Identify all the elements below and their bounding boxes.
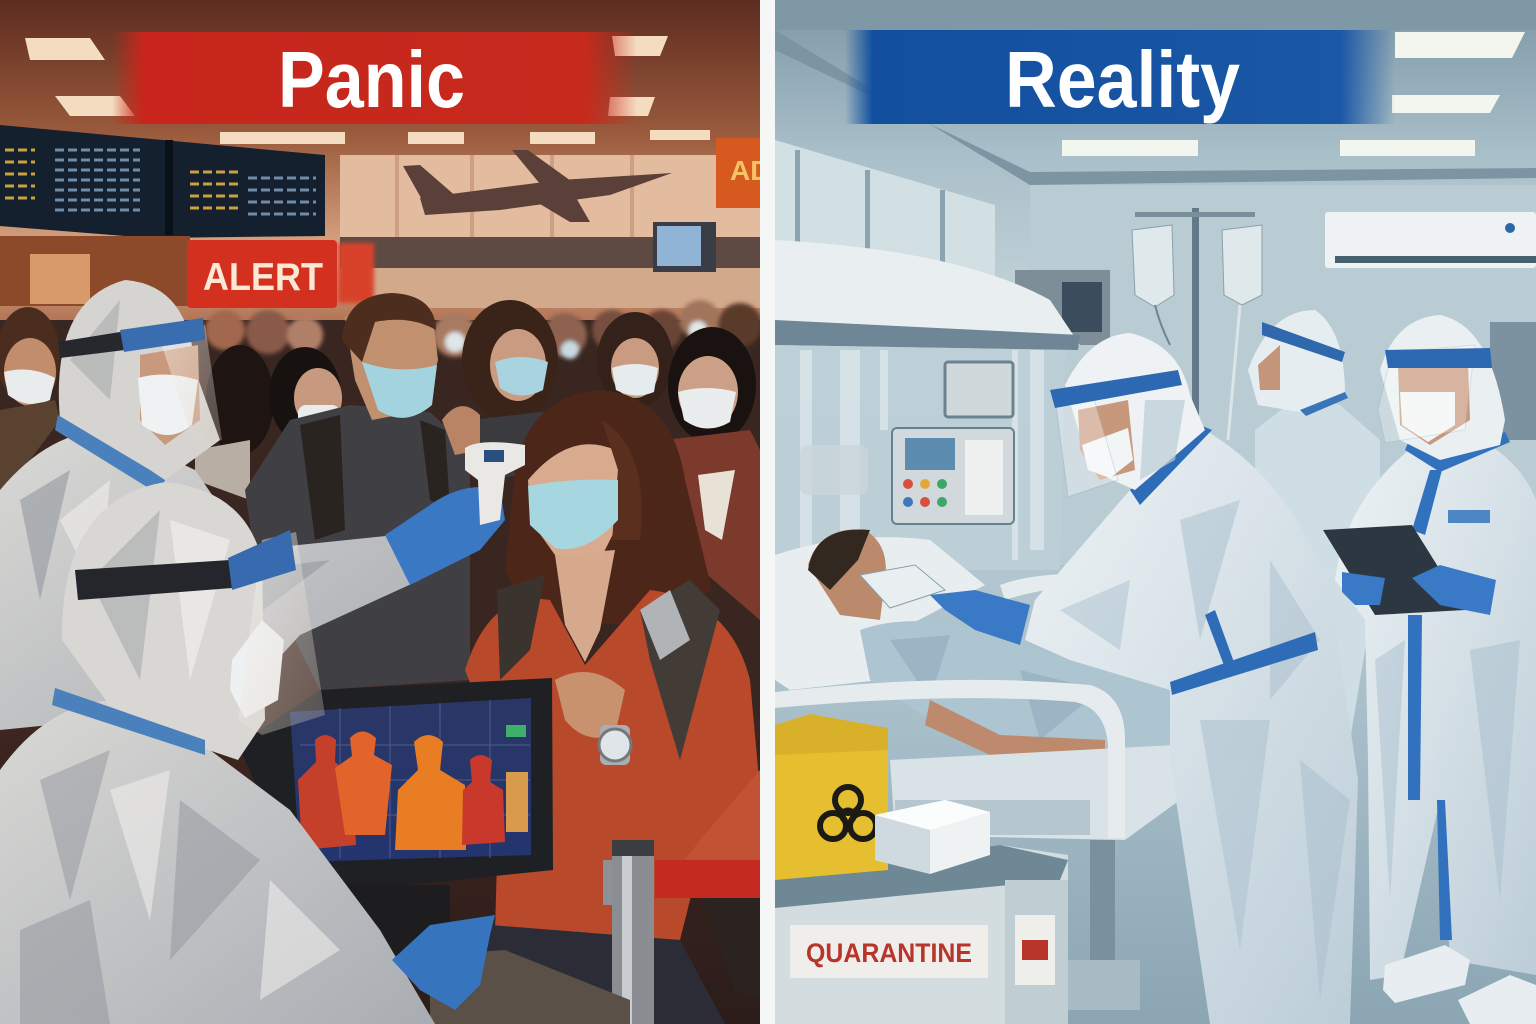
panic title banner: Panic <box>278 35 465 124</box>
cart with quarantine label <box>775 845 1068 1024</box>
face and mask <box>1078 400 1135 480</box>
orange AD sign <box>716 138 770 208</box>
face <box>140 345 200 445</box>
waist band <box>1170 632 1318 695</box>
shield <box>1378 345 1475 443</box>
handheld thermometer <box>465 442 525 525</box>
face <box>1398 362 1470 445</box>
pointing glove <box>392 915 495 1010</box>
panic title banner <box>112 32 637 124</box>
IV stand with drip bags <box>1132 208 1262 458</box>
quarantine label: QUARANTINE <box>806 938 972 968</box>
alert sign <box>187 240 374 308</box>
neck and face <box>555 550 615 662</box>
medical worker right <box>1323 315 1536 1024</box>
hazmat worker foreground <box>0 482 495 1024</box>
mask <box>230 620 284 718</box>
man with backpack <box>245 293 480 690</box>
small wall television <box>653 222 716 272</box>
panel: reality isolation ward <box>775 0 1536 1024</box>
thermal silhouettes <box>298 732 505 850</box>
left brown wall <box>0 236 190 306</box>
backpack straps <box>497 575 545 680</box>
collar <box>1405 432 1510 472</box>
quarantine label <box>790 925 988 978</box>
hood <box>1380 315 1505 460</box>
traveller woman right <box>597 312 673 408</box>
panel: panic airport scene <box>0 0 770 1024</box>
crowd of masked travellers <box>0 300 762 720</box>
face shield <box>238 532 325 735</box>
headband <box>1385 348 1492 368</box>
isolation tent <box>775 240 1080 570</box>
collar <box>1130 425 1212 505</box>
windows on left wall <box>775 140 995 285</box>
hand <box>555 672 625 738</box>
icon: airplane silhouette <box>403 150 672 222</box>
patient <box>808 529 1170 760</box>
reality title banner <box>845 30 1395 124</box>
divider <box>760 0 775 1024</box>
face shield <box>160 325 222 445</box>
headband <box>58 318 205 358</box>
ceiling lights <box>25 36 710 144</box>
small side label <box>1015 915 1055 985</box>
orange AD sign: AD <box>730 155 770 186</box>
glove <box>385 487 505 585</box>
window wall <box>340 155 760 240</box>
shield <box>1055 385 1118 497</box>
overhead beam <box>340 237 760 268</box>
traveller far left <box>0 307 60 500</box>
blue collar <box>52 688 205 755</box>
screen legend <box>506 725 528 832</box>
ceiling lights <box>1062 32 1525 156</box>
inspection desk <box>430 950 630 1024</box>
wall panel right <box>1490 322 1536 440</box>
medical worker foreground <box>930 333 1358 1024</box>
flight departure boards <box>0 125 325 238</box>
vital signs monitors <box>800 362 1014 524</box>
yellow biohazard bin <box>775 714 888 880</box>
boots <box>1383 945 1470 1003</box>
backpack lower right <box>700 860 760 1000</box>
ward back wall <box>1030 185 1536 565</box>
wall medical unit <box>1015 270 1110 345</box>
white supply box <box>875 800 990 874</box>
clipboard <box>1323 525 1465 615</box>
stanchion with red tape <box>603 840 760 1024</box>
glove <box>930 590 1030 645</box>
hood <box>59 280 220 480</box>
patient arm <box>925 700 1105 760</box>
headband <box>75 560 232 600</box>
woman traveller with red sweater <box>465 390 760 1024</box>
biohazard symbol <box>820 787 876 839</box>
headband <box>1050 370 1182 408</box>
chest label <box>1448 510 1490 523</box>
ceiling structure <box>775 0 1536 30</box>
mask <box>138 374 198 435</box>
long brown hair <box>505 390 712 625</box>
alert sign: ALERT <box>203 256 323 299</box>
background worker <box>1248 310 1380 800</box>
oxygen mask <box>860 565 945 608</box>
woman with dark hair behind <box>195 345 274 500</box>
patient head <box>808 529 886 620</box>
hood <box>62 482 265 760</box>
reality title banner: Reality <box>1005 35 1240 124</box>
face mask <box>528 480 618 549</box>
traveller woman centre <box>462 300 570 480</box>
bed and rails <box>775 574 1180 1010</box>
suit body <box>1025 430 1358 1024</box>
sweater <box>465 590 760 940</box>
hood <box>1065 333 1205 490</box>
jeans <box>480 925 725 1024</box>
blue zip <box>1408 615 1422 800</box>
blue neck trim <box>55 415 165 495</box>
gloves <box>1342 572 1385 605</box>
hazmat worker upper left <box>0 280 505 730</box>
thermal camera monitor <box>238 678 553 955</box>
woman in rust jacket <box>665 327 760 620</box>
wristwatch <box>599 725 631 765</box>
air conditioner <box>1325 212 1536 268</box>
bed pillow <box>775 537 985 690</box>
